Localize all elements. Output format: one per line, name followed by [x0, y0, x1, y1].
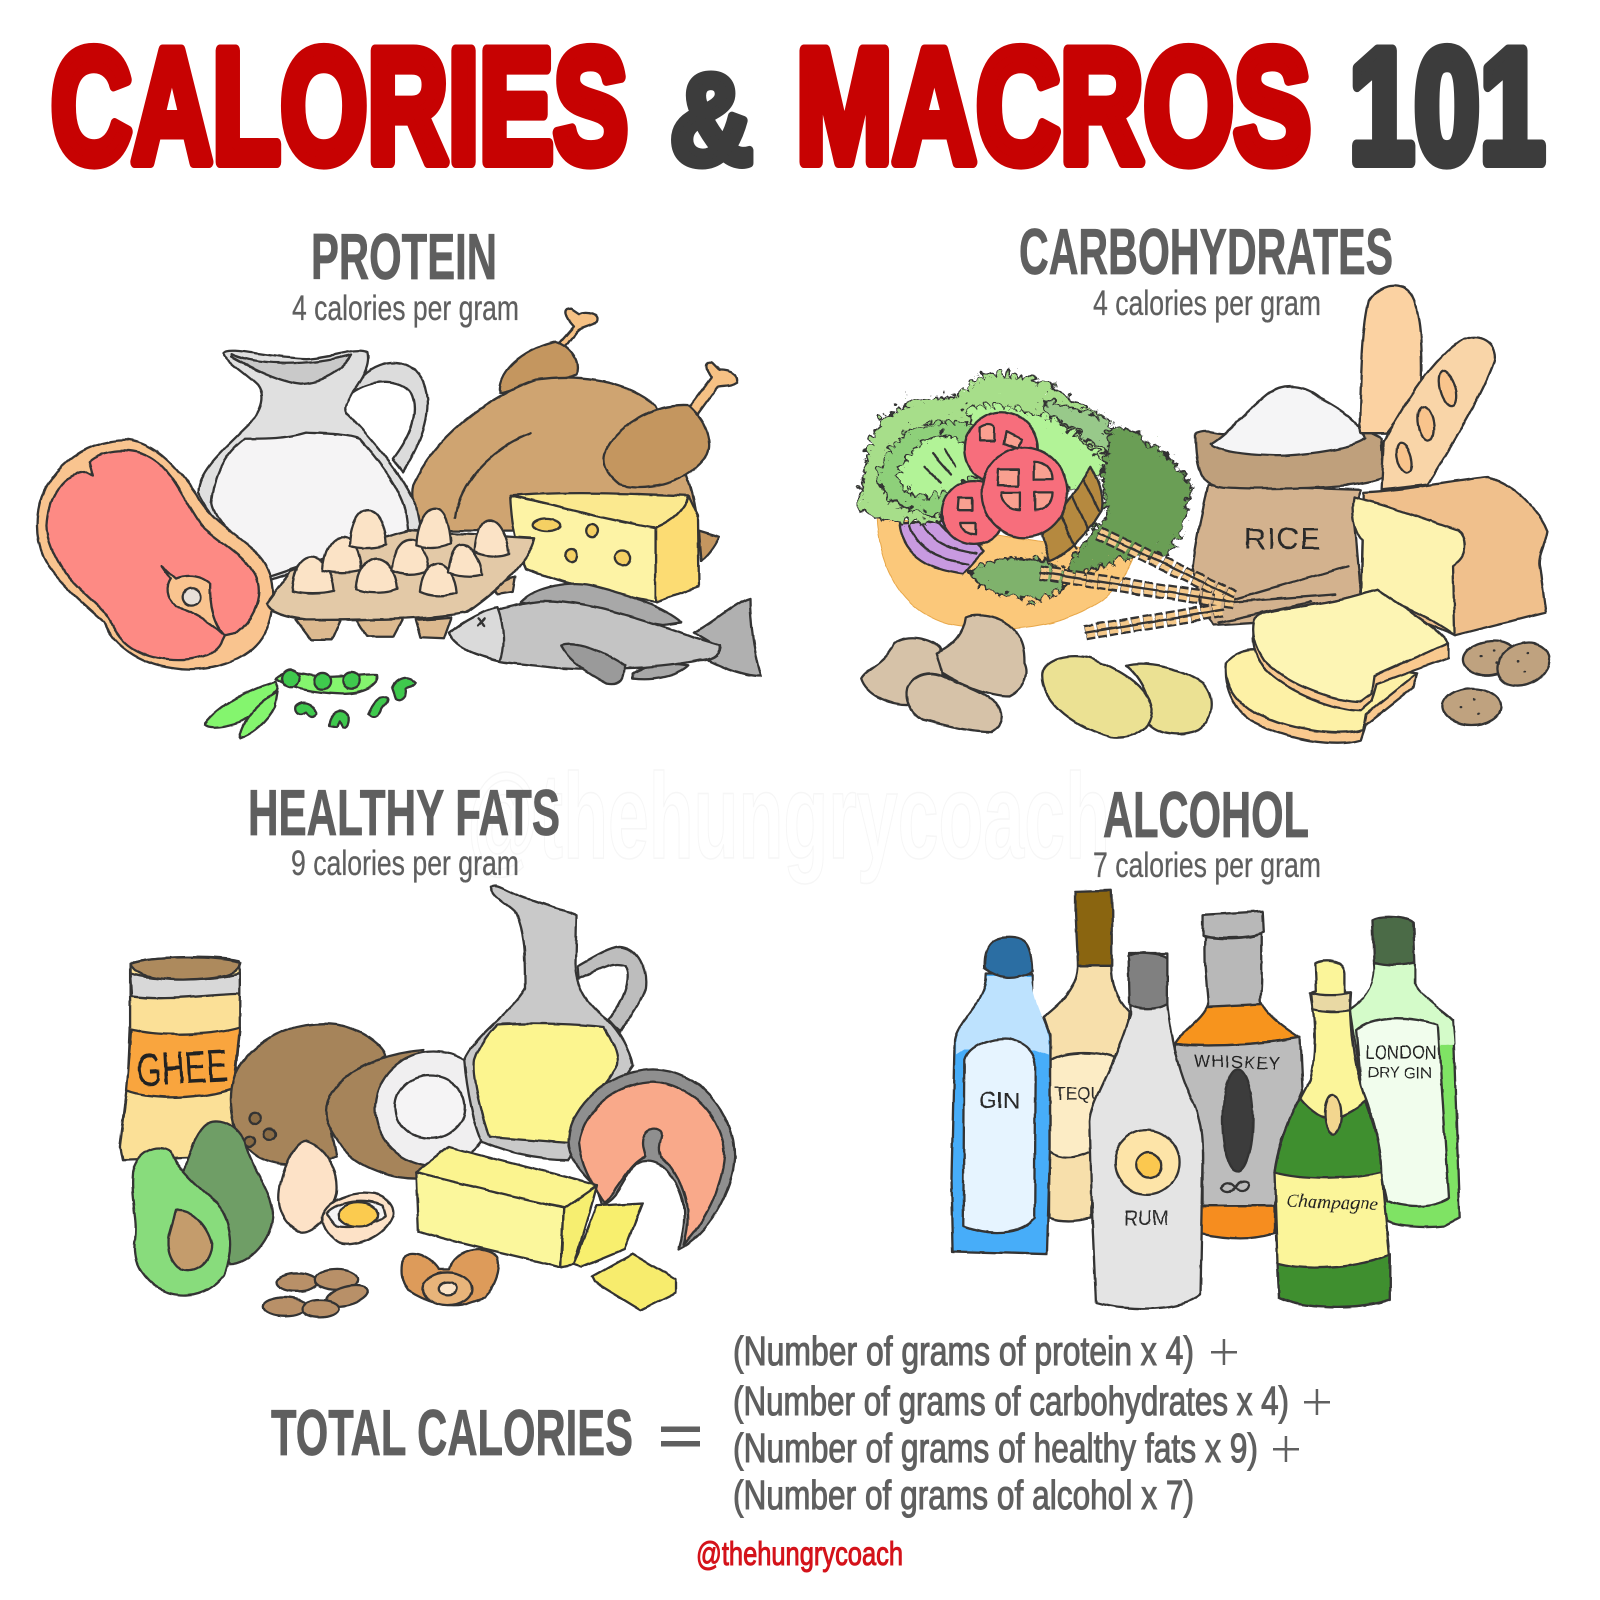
- icon: almonds: [263, 1269, 370, 1317]
- illustration: protein foods: [37, 309, 761, 739]
- icon: fish: [449, 584, 761, 684]
- subheading: protein calories: 4 calories per gram: [292, 289, 519, 328]
- icon: bread loaf: [1353, 477, 1547, 635]
- heading: carbohydrates: CARBOHYDRATES: [1019, 215, 1393, 288]
- icon: tequila bottle: [1044, 891, 1129, 1221]
- heading: healthy fats: HEALTHY FATS: [248, 776, 560, 849]
- icon: steak: [37, 440, 273, 670]
- subheading: alcohol calories: 7 calories per gram: [1093, 846, 1321, 885]
- icon: gin bottle: [952, 937, 1050, 1254]
- icon: wheat stalks: [1040, 533, 1348, 633]
- watermark: @thehungrycoach: [467, 748, 1110, 884]
- formula line: alcohol: (Number of grams of alcohol x 7): [733, 1472, 1194, 1518]
- illustration: alcohol bottles: [952, 891, 1460, 1309]
- icon: whiskey bottle: [1173, 911, 1303, 1238]
- icon: baguettes: [1360, 286, 1495, 490]
- heading: protein: PROTEIN: [311, 220, 497, 293]
- icon: champagne bottle: [1274, 961, 1390, 1307]
- icon: butter: [416, 1147, 676, 1310]
- icon: salad bowl: [854, 366, 1185, 629]
- equals sign: [661, 1426, 700, 1446]
- heading: alcohol: ALCOHOL: [1103, 778, 1309, 851]
- icon: london dry gin bottle: LONDON: [1365, 1042, 1437, 1064]
- icon: rum bottle: [1090, 953, 1203, 1309]
- title: [51, 16, 1545, 197]
- subheading: carbohydrate calories: 4 calories per gram: [1093, 284, 1321, 323]
- icon: champagne bottle: Champagne: [1285, 1191, 1378, 1215]
- formula line: carbohydrates: (Number of grams of carbohydrates x 4): [733, 1378, 1289, 1424]
- icon: oil jug: [464, 886, 646, 1160]
- icon: edamame peas: [204, 670, 416, 739]
- icon: ghee jar: [120, 957, 241, 1160]
- icon: small potatoes: [1443, 634, 1557, 725]
- formula line: healthy fats: (Number of grams of healthy fats x 9): [733, 1425, 1258, 1471]
- icon: coconut: [231, 1024, 492, 1179]
- icon: rice sack: RICE: [1244, 522, 1320, 556]
- subheading: fat calories: 9 calories per gram: [291, 844, 519, 883]
- credit handle: @thehungrycoach: [696, 1535, 903, 1572]
- illustration: carbohydrate foods: [854, 286, 1557, 743]
- icon: avocados: [132, 1121, 273, 1295]
- total calories label: TOTAL CALORIES: [271, 1396, 633, 1469]
- icon: london dry gin bottle: [1350, 917, 1460, 1227]
- plus sign: [1273, 1436, 1299, 1462]
- formula line: protein: (Number of grams of protein x 4): [733, 1328, 1194, 1374]
- icon: cheese: [510, 493, 699, 602]
- title: MACROS: [796, 16, 1311, 197]
- icon: sliced bread: [1225, 589, 1448, 743]
- icon: salmon steak: [569, 1069, 735, 1249]
- title: CALORIES: [51, 16, 628, 197]
- plus sign: [1304, 1389, 1330, 1415]
- formula: [733, 1328, 1330, 1518]
- icon: milk jug: [198, 351, 427, 582]
- icon: eggs: [279, 1141, 393, 1244]
- plus sign: [1211, 1339, 1237, 1365]
- icon: rice sack: [1193, 387, 1384, 625]
- icon: rum bottle: RUM: [1124, 1206, 1169, 1230]
- icon: whiskey bottle: WHISKEY: [1194, 1050, 1281, 1074]
- illustration: healthy fat foods: [120, 886, 735, 1317]
- title: &: [670, 49, 753, 192]
- icon: potatoes: [1042, 656, 1211, 738]
- icon: egg tray: [266, 509, 535, 640]
- icon: chicken: [412, 309, 738, 561]
- icon: root vegetables: [861, 615, 1026, 732]
- icon: london dry gin bottle: DRY GIN: [1367, 1065, 1432, 1082]
- icon: gin bottle: GIN: [979, 1088, 1020, 1115]
- icon: tequila bottle: TEQU: [1055, 1083, 1104, 1104]
- icon: ghee jar: GHEE: [135, 1039, 229, 1096]
- icon: walnuts: [402, 1250, 499, 1305]
